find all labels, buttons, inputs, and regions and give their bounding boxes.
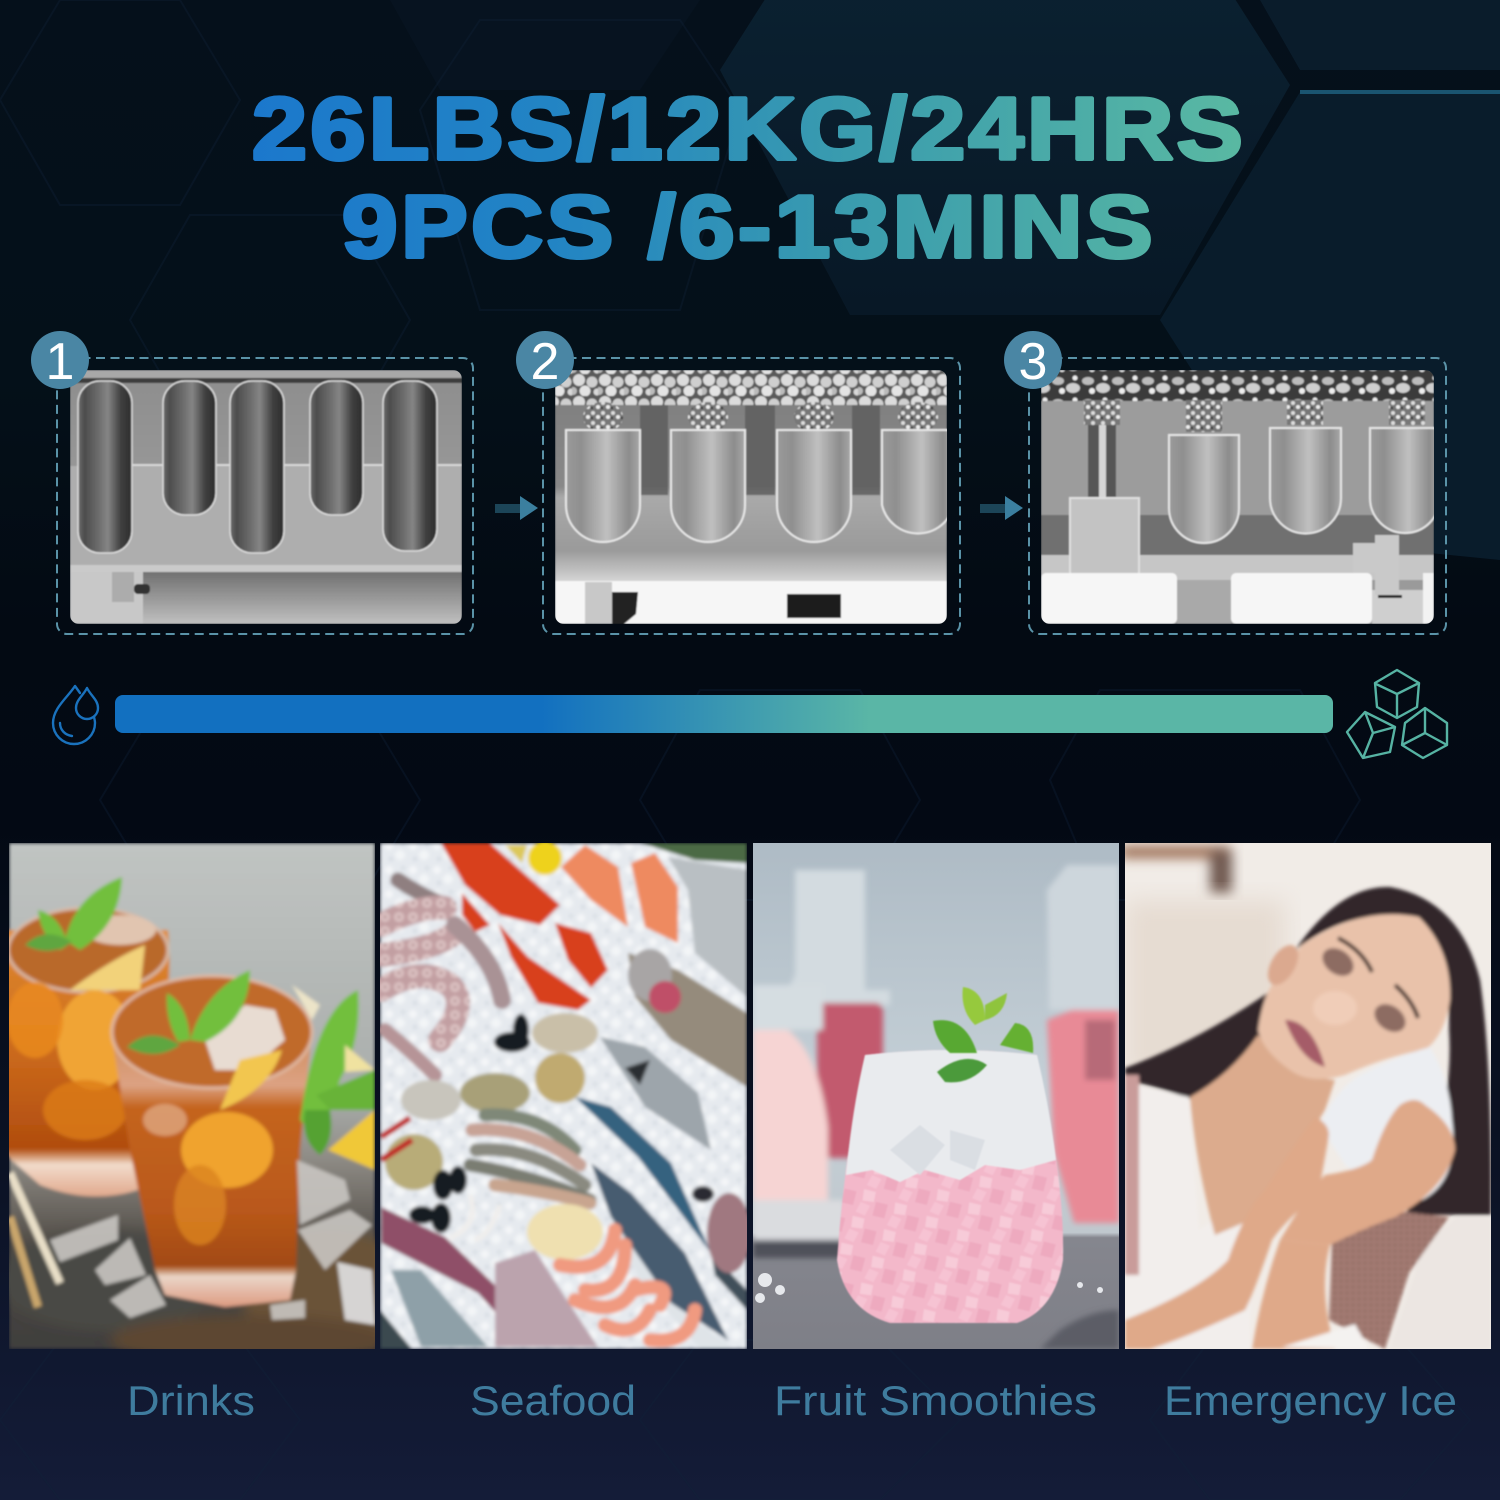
- step badge 3: 3: [1019, 333, 1047, 391]
- step badge 2: [516, 331, 574, 391]
- oysters and mussels: [385, 1013, 598, 1233]
- panel: step 3 ice cubes released: [1029, 358, 1446, 634]
- panel: step 1 water tubes: [57, 358, 473, 634]
- dorado fish: [600, 1037, 711, 1150]
- hands and arms: [1125, 1100, 1455, 1349]
- eyes and brows: [1317, 938, 1418, 1038]
- title line 1: 26LBS/12KG/24HRS: [252, 79, 1246, 178]
- arrow: step 2 to 3: [980, 496, 1023, 520]
- title line 2: 9PCS /6-13MINS: [342, 177, 1156, 276]
- ice chunks: [50, 1160, 375, 1325]
- title: [252, 79, 1246, 276]
- glass of pink crushed ice: [837, 1050, 1063, 1323]
- loose ice on table: [755, 1273, 1103, 1303]
- cushion: [1282, 1324, 1369, 1349]
- label: drinks: Drinks: [127, 1377, 255, 1424]
- label: seafood: Seafood: [470, 1377, 636, 1424]
- step badge 1: [31, 331, 89, 391]
- back glass of iced tea: [0, 908, 169, 1196]
- nose: [1313, 991, 1357, 1025]
- hair: [1125, 887, 1491, 1215]
- arrow: step 1 to 2: [495, 496, 538, 520]
- neck and chest: [1190, 1035, 1335, 1235]
- photo: fruit smoothies: [753, 843, 1119, 1349]
- white top: [1125, 1083, 1252, 1349]
- prawns: [470, 1115, 590, 1203]
- squid and fish at bottom: [380, 1195, 598, 1349]
- panel: step 2 ice forming: [543, 358, 960, 634]
- mint leaves: [25, 877, 375, 1155]
- photo: seafood: [380, 841, 751, 1349]
- progress bar: [115, 695, 1333, 733]
- label: emergency ice: Emergency Ice: [1164, 1377, 1457, 1424]
- small octopus: [707, 1193, 751, 1273]
- herb and lemon: [505, 841, 747, 875]
- trout: [628, 949, 747, 1087]
- photo: drinks: [9, 843, 375, 1349]
- icon: ice cubes: [1347, 670, 1447, 758]
- salmon steaks: [561, 845, 678, 943]
- striped fish: [668, 857, 747, 997]
- step badge 1: 1: [46, 333, 74, 391]
- ice bag: [1320, 1047, 1453, 1200]
- octopus: [381, 880, 502, 1075]
- shrimp: [560, 1230, 695, 1341]
- mint sprig: [933, 987, 1033, 1082]
- lemon wedges: [328, 1110, 375, 1170]
- step badge 2: 2: [531, 333, 559, 391]
- lobster: [441, 843, 608, 1010]
- lips: [1285, 1020, 1325, 1067]
- photo: emergency ice: [1120, 843, 1491, 1349]
- pink knit scarf: [1329, 1210, 1449, 1349]
- red crayfish claws: [381, 1118, 412, 1160]
- icon: water drops: [53, 686, 98, 744]
- front glass of iced tea: [111, 976, 312, 1307]
- blurred brown shelf: [1120, 846, 1232, 895]
- label: fruit smoothies: Fruit Smoothies: [774, 1377, 1097, 1424]
- scallop: [527, 1204, 603, 1260]
- blurred bottles: [753, 865, 1119, 1349]
- step badge 3: [1004, 331, 1062, 391]
- mackerel: [575, 1097, 747, 1349]
- sofa: [1417, 1213, 1491, 1261]
- face: [1258, 914, 1450, 1079]
- paper straws: [10, 1173, 60, 1307]
